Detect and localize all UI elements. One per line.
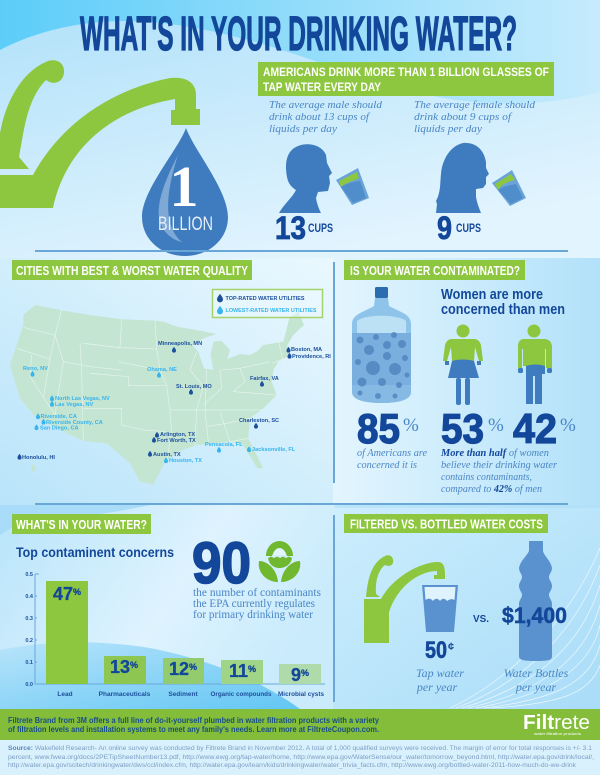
heading banner: Americans drink (258, 62, 554, 96)
text: average female: The average female should (414, 99, 536, 111)
top-rated city labels: Honolulu, HI (22, 455, 55, 461)
bar: organic compounds: 11 (229, 661, 248, 681)
stat: 53 percent: % (488, 415, 504, 436)
text: water bottles per year: per year (515, 680, 556, 694)
heading: contaminated (344, 260, 525, 280)
stat: 90 contaminants: 90 (192, 531, 251, 596)
stat: 42 percent: % (560, 415, 576, 436)
top-rated city labels: St. Louis, MO (176, 384, 212, 390)
icon: water bottle (519, 541, 552, 661)
lowest-rated city labels: San Diego, CA (40, 426, 79, 432)
heading: filtered vs bottled (344, 514, 548, 533)
lowest-rated city labels: North Las Vegas, NV (55, 396, 110, 402)
icon: EPA logo (259, 541, 300, 582)
lowest-rated city labels: Jacksonville, FL (252, 447, 296, 453)
bar: microbial cysts: % (301, 668, 309, 678)
text: 9 cups: 9 (437, 210, 452, 246)
heading: contaminated: IS YOUR WATER CONTAMINATED? (350, 264, 520, 278)
stat: 90 contaminants: the number of contaminants (193, 587, 322, 599)
lowest-rated city labels: Pensacola, FL (205, 442, 243, 448)
y axis: 0.2 (25, 638, 33, 644)
top-rated city labels: Fairfax, VA (250, 376, 279, 382)
icon: man drinking (279, 144, 369, 213)
text: water bottles per year (504, 666, 569, 694)
bar: microbial cysts: 9 (291, 665, 301, 685)
stat: 85 percent (357, 405, 427, 471)
icon: large green faucet (0, 60, 200, 208)
lowest-rated city labels: Riverside County, CA (46, 420, 103, 426)
y axis: 0.3 (25, 616, 33, 622)
bar: lead (46, 581, 88, 698)
y axis (25, 572, 325, 688)
lowest-rated city labels: Reno, NV (23, 366, 48, 372)
bar: organic compounds: Organic compounds (210, 691, 272, 698)
text: average male (269, 99, 382, 135)
text: more than half of women (440, 447, 558, 495)
stat: 90 contaminants: the EPA currently regulates (193, 598, 316, 610)
text: more than half of women: compared to 42% of men (441, 483, 542, 495)
bar: sediment (163, 658, 204, 698)
icon: water drop 1 billion: 1 (170, 154, 198, 219)
bar: lead: Lead (57, 691, 73, 698)
top-rated city labels: Austin, TX (153, 452, 181, 458)
y axis: 0.5 (25, 572, 33, 578)
bar: pharmaceuticals: % (130, 660, 138, 670)
text: versus: VS. (473, 614, 489, 625)
bar: sediment: % (189, 662, 197, 672)
lowest-rated city labels: Houston, TX (169, 458, 202, 464)
heading: cities: CITIES WITH BEST & WORST WATER QUALITY (16, 264, 249, 278)
source notes (8, 745, 594, 769)
stat: 85 percent: of Americans are (357, 447, 427, 459)
heading: top contaminent concerns: Top contaminent concerns (16, 544, 174, 560)
heading: what's in your water: WHAT'S IN YOUR WATER? (16, 518, 147, 532)
icon: water drop 1 billion (142, 128, 228, 256)
bar chart: top contaminant concerns (25, 572, 325, 698)
top-rated city labels (18, 341, 331, 461)
heading: what's in your water (12, 514, 151, 534)
top-rated city labels: Arlington, TX (160, 432, 195, 438)
text: more than half of women: More than half of women (440, 447, 549, 459)
stat: 1,400 dollars: $1,400 (502, 603, 567, 628)
footer band (0, 709, 600, 740)
bar: microbial cysts: Microbial cysts (278, 691, 324, 698)
stat: 85 percent: 85 (357, 405, 400, 452)
text: 13 cups: 13 (275, 210, 306, 246)
icon: woman drinking (436, 143, 526, 213)
icon: water glass (422, 585, 458, 632)
bar: sediment: Sediment (168, 691, 198, 698)
text: 9 cups (437, 210, 481, 246)
footer band: Filtrete Brand from 3M offers a full line of do-it-yourself plumbed in water filtration products with a variety (8, 716, 380, 725)
footer band: of filtration levels and installation systems to meet any family's needs. Learn more at FiltreteCoupon.com. (8, 725, 379, 734)
bar: lead: 47 (53, 584, 73, 604)
map legend (212, 290, 322, 318)
heading banner: Americans drink: TAP WATER EVERY DAY (263, 80, 381, 94)
bar: organic compounds: % (248, 664, 256, 674)
text: more than half of women: contains contaminants, (441, 471, 532, 483)
icon: woman figure 53 percent (443, 324, 483, 405)
lowest-rated city labels: Ohama, NE (147, 367, 177, 373)
text: average male: drink about 13 cups of (269, 111, 371, 123)
top-rated city labels: Minneapolis, MN (158, 341, 202, 347)
stat: 53 percent: 53 (441, 405, 484, 452)
bar: lead: % (73, 587, 81, 597)
Filtrete logo: water filtration products (534, 732, 581, 736)
top-rated city labels: Fort Worth, TX (157, 438, 196, 444)
stat: 85 percent: concerned it is (357, 459, 417, 471)
text: tap water per year: Tap water (416, 666, 464, 680)
heading: women more concerned (441, 286, 565, 318)
map legend: LOWEST-RATED WATER UTILITIES (226, 308, 317, 314)
heading: filtered vs bottled: FILTERED VS. BOTTLED WATER COSTS (350, 518, 543, 532)
source notes: Source: Wakefield Research- An online survey was conducted by Filtrete Brand in November 2012. A total of 1,000 qualified surveys were received. The margin of error for total responses is +/- 3.1 (8, 745, 593, 752)
stat: 50 cents: 50 (425, 637, 447, 664)
bar: pharmaceuticals: Pharmaceuticals (99, 691, 151, 698)
text: average male: liquids per day (269, 123, 337, 135)
text: average female: drink about 9 cups of (414, 111, 513, 123)
top-rated city labels: Boston, MA (291, 347, 322, 353)
decorative white fan lines (450, 548, 600, 708)
bar: microbial cysts (278, 664, 324, 698)
map legend: TOP-RATED WATER UTILITIES (226, 296, 305, 302)
stat: 90 contaminants (192, 531, 322, 621)
text: average male: The average male should (269, 99, 382, 111)
Filtrete logo: Filtrete (523, 712, 590, 734)
text: 9 cups: CUPS (456, 221, 481, 235)
text: 13 cups (275, 210, 333, 246)
lowest-rated city labels: Las Vegas, NV (55, 402, 94, 408)
y axis: 0.4 (25, 594, 34, 600)
text: tap water per year (416, 666, 464, 694)
y axis: 0.1 (25, 660, 33, 666)
heading: cities (12, 260, 252, 280)
stat: 50 cents: ¢ (448, 641, 454, 653)
top-rated city labels: Providence, RI (292, 354, 331, 360)
icon: man figure 42 percent (518, 324, 552, 404)
map of the United States (10, 305, 304, 485)
stat: 42 percent: 42 (513, 405, 557, 452)
bar: pharmaceuticals: 13 (110, 657, 130, 677)
lowest-rated city labels: Riverside, CA (40, 414, 77, 420)
bar: pharmaceuticals (99, 656, 151, 698)
text: average female: liquids per day (414, 123, 482, 135)
text: 13 cups: CUPS (308, 221, 333, 235)
text: tap water per year: per year (416, 680, 457, 694)
stat: 90 contaminants: for primary drinking water (193, 609, 313, 621)
heading banner: Americans drink: AMERICANS DRINK MORE THAN 1 BILLION GLASSES OF (263, 65, 549, 79)
lowest-rated city labels (23, 366, 296, 464)
icon: water cooler jug with contaminants (352, 287, 411, 403)
text: more than half of women: believe their drinking water (441, 459, 558, 471)
heading: women more concerned: concerned than men (441, 301, 565, 318)
text: water bottles per year: Water Bottles (504, 666, 569, 680)
bar: organic compounds (210, 660, 272, 698)
stat: 85 percent: % (403, 415, 419, 436)
bar: sediment: 12 (169, 659, 189, 679)
icon: water drop 1 billion: BILLION (158, 214, 213, 235)
text: average female (414, 99, 536, 135)
source notes: http://water.epa.gov/scitech/drinkingwater/dws/ccl/index.cfm, http://water.epa.gov/learn/kids/drinkingwater/water_trivia_facts.cfm, http://www.ewg.org/bottled-water-2011-how-much-do-we-drink (8, 762, 577, 769)
y axis: 0.0 (25, 682, 33, 688)
source notes: percent, www.fwea.org/docs/2PETipSheetNumber13.pdf, http://www.ewg.org/tap-water/home, http://www.epa.gov/WaterSense/our_water/tomorrow_beyond.html, http://water.epa.gov/drink/local/, (8, 754, 594, 761)
icon: small green faucet (364, 555, 445, 643)
top-rated city labels: Charleston, SC (239, 418, 279, 424)
heading: women more concerned: Women are more (441, 286, 543, 303)
